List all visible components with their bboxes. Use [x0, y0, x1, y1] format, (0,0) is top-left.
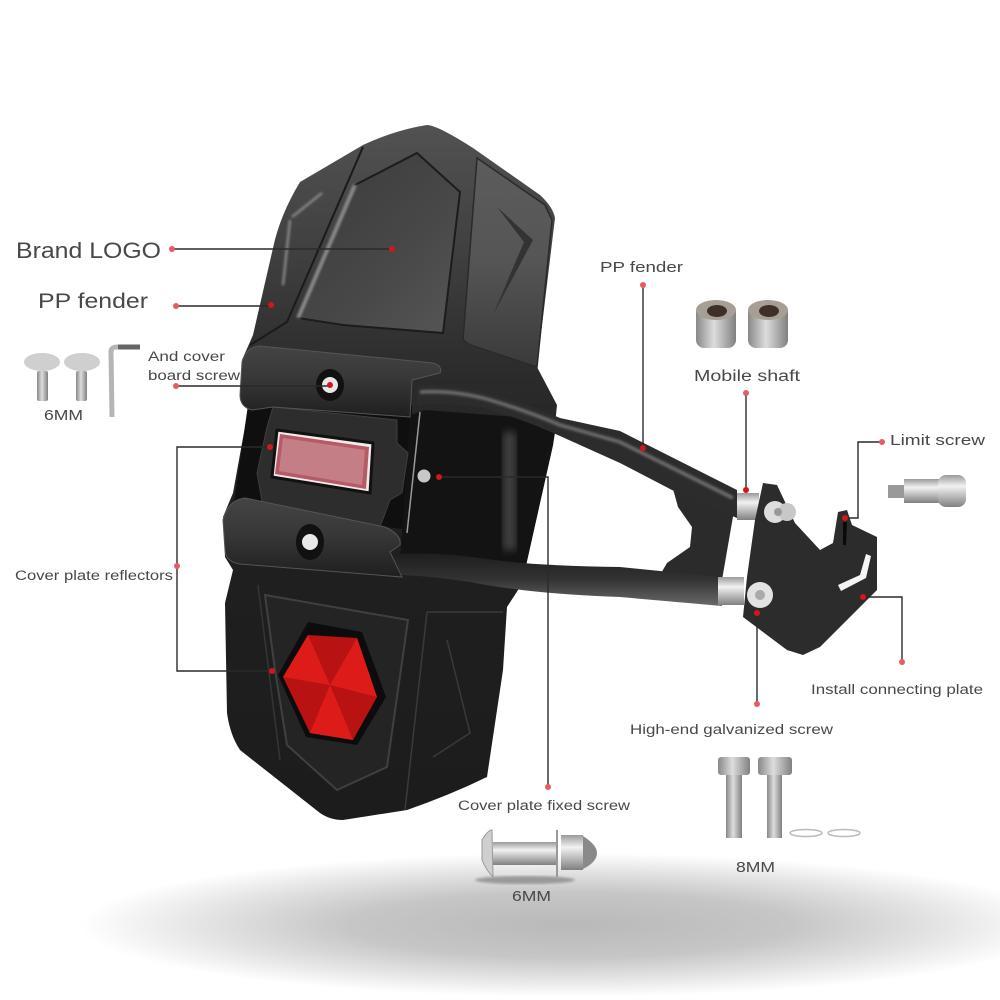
support arms — [392, 385, 737, 606]
label: Mobile shaft: Mobile shaft — [694, 368, 801, 385]
fender body — [223, 125, 557, 820]
label: Cover plate reflectors: Cover plate reflectors — [15, 568, 173, 583]
label: 6MM bottom: 6MM — [512, 888, 551, 905]
fender — [223, 125, 557, 820]
lower bracket band — [223, 498, 402, 577]
label: Limit screw: Limit screw — [890, 432, 985, 449]
label: And cover board screw: And cover — [148, 349, 226, 364]
right panel notch — [493, 207, 533, 315]
rear dark block — [400, 410, 557, 570]
leader lines — [172, 249, 902, 787]
upper bracket band — [240, 346, 441, 417]
6MM screws and hex key — [24, 347, 140, 417]
fender screws — [296, 369, 430, 560]
top right panel — [463, 158, 552, 367]
slit and slot — [843, 522, 847, 545]
brace — [660, 478, 735, 580]
dark recess — [233, 405, 412, 530]
label: Brand LOGO: Brand LOGO — [16, 238, 161, 263]
label: PP fender right: PP fender — [600, 259, 683, 276]
label: 8MM: 8MM — [736, 859, 775, 876]
upper tube — [417, 385, 737, 518]
mobile shafts — [696, 300, 788, 348]
top centre panel — [298, 153, 460, 333]
hexagonal reflector — [278, 622, 386, 745]
lower panel — [265, 595, 408, 790]
label: Install connecting plate: Install connecting plate — [811, 682, 983, 697]
centre plate — [257, 407, 408, 527]
label: Cover plate fixed screw: Cover plate fixed screw — [458, 798, 630, 813]
8MM screws and washers — [718, 757, 860, 838]
lower tube — [392, 554, 722, 606]
long highlight — [298, 185, 355, 318]
label: 6MM left: 6MM — [44, 407, 83, 424]
left fold line — [250, 147, 363, 345]
leader dots on white — [169, 246, 905, 790]
label: And cover board screw: board screw — [148, 368, 240, 383]
cover plate fixed screw — [475, 830, 597, 884]
rectangular reflector — [272, 430, 373, 493]
ground shadow — [80, 853, 1000, 997]
connecting plate — [718, 483, 877, 655]
lower left edge line — [258, 585, 280, 760]
rear block highlight — [503, 432, 516, 550]
label: High-end galvanized screw: High-end galvanized screw — [630, 722, 833, 737]
label: PP fender left: PP fender — [38, 290, 148, 313]
small left marks — [283, 193, 322, 285]
strip line — [407, 412, 420, 533]
plate screws — [764, 501, 786, 523]
limit screw — [888, 475, 966, 507]
lower right panel — [405, 612, 503, 810]
leader dots on product — [267, 246, 866, 674]
